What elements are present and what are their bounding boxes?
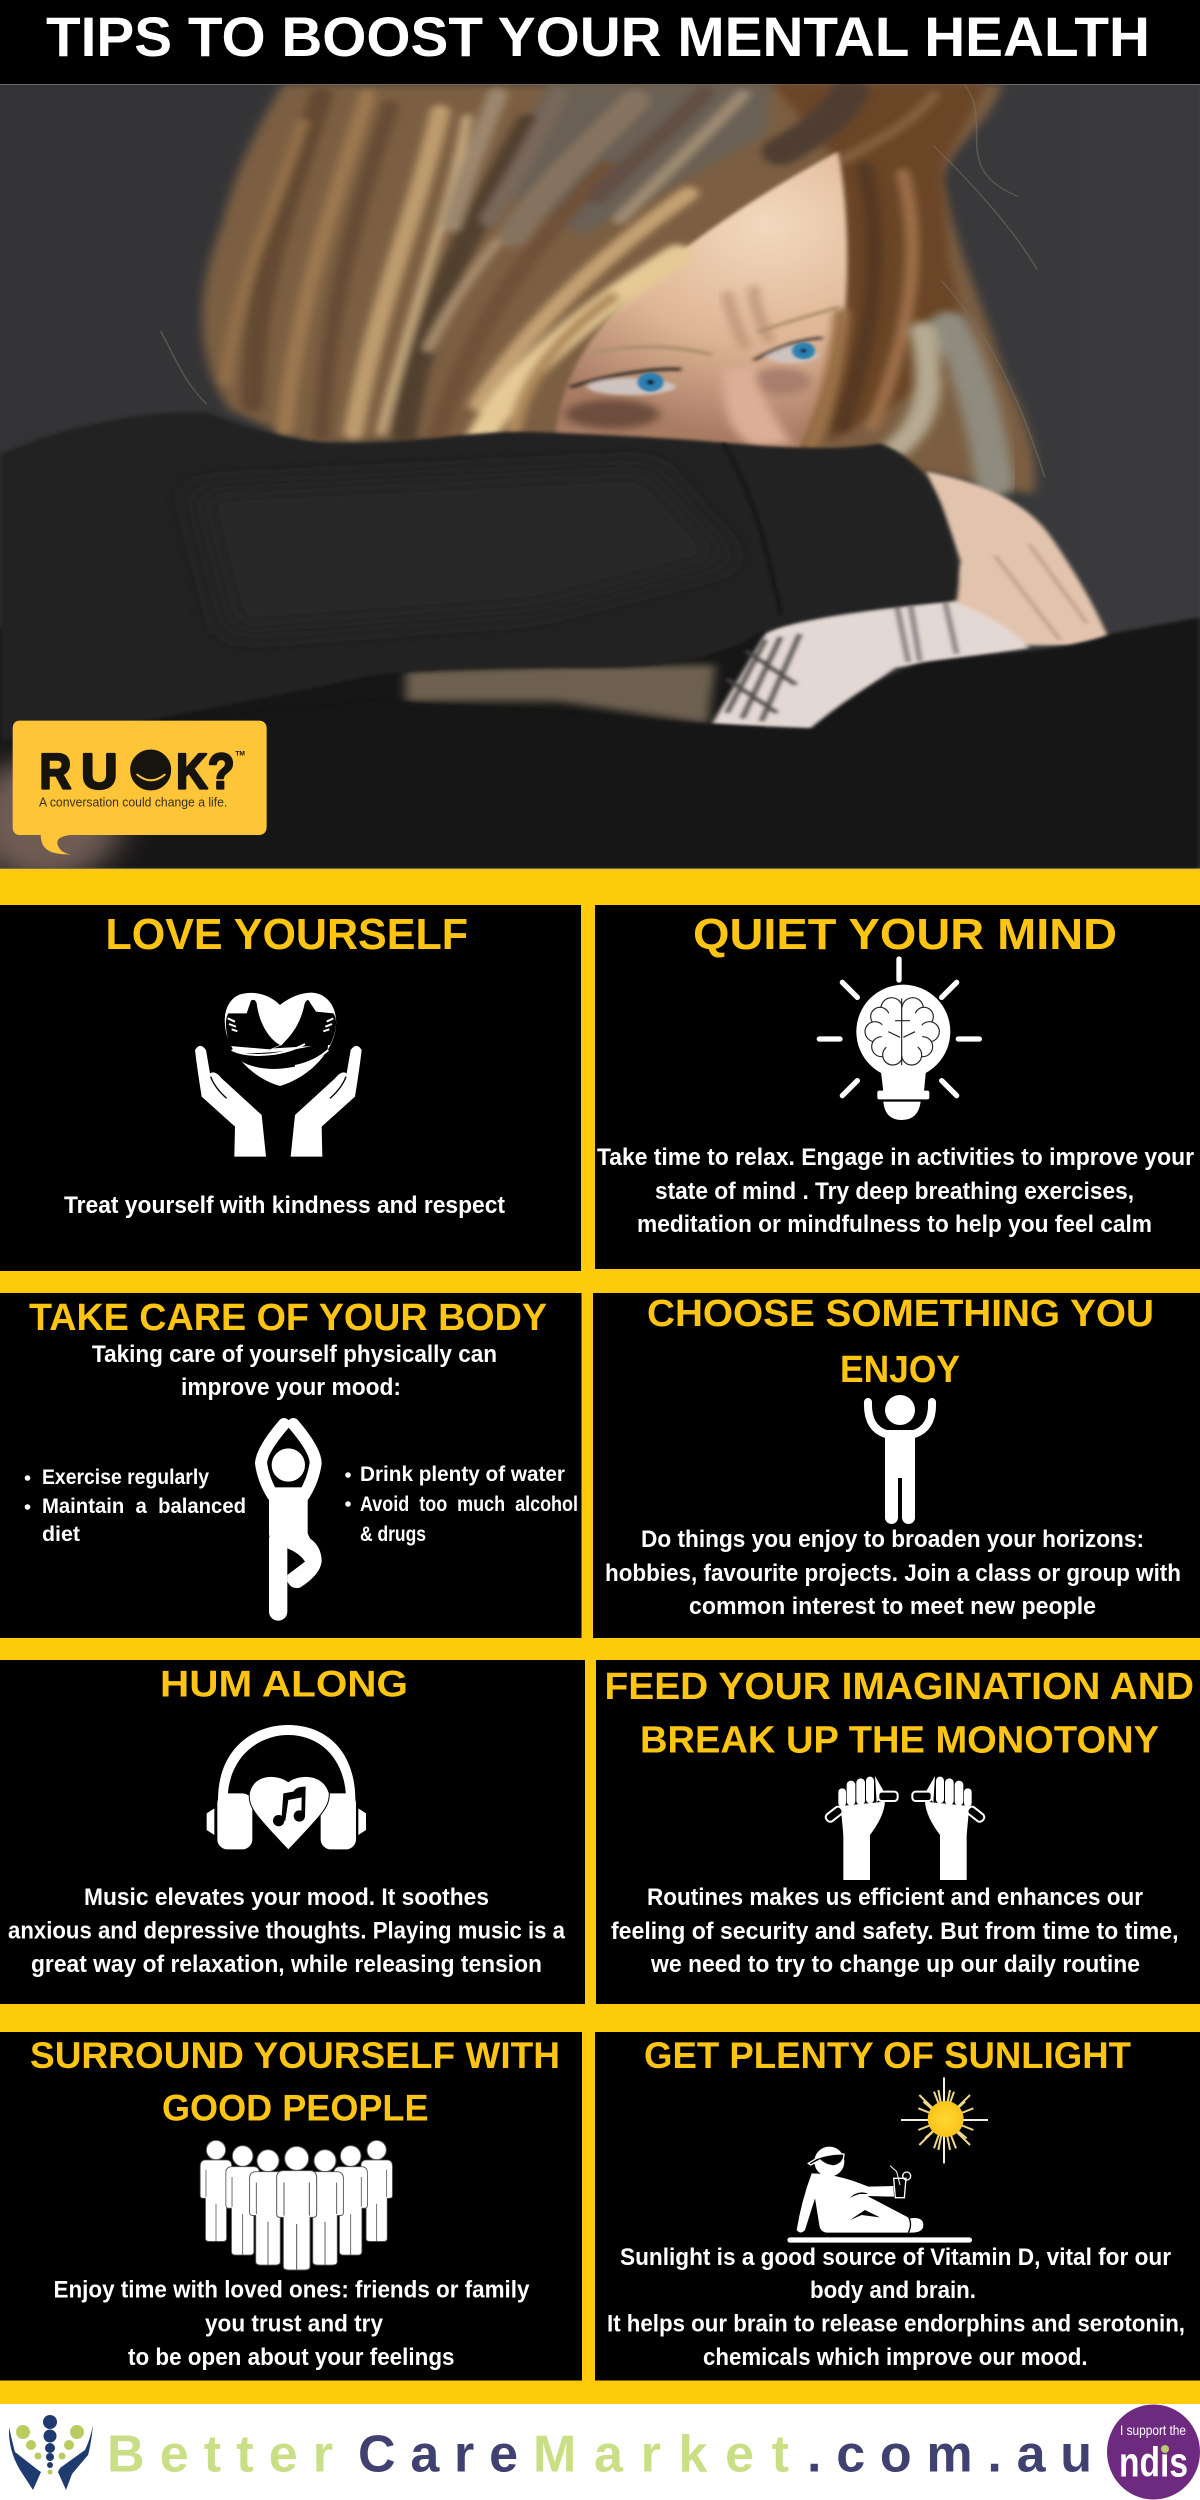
heading: LOVE YOURSELF [106, 910, 468, 959]
wordmark: Better [107, 2426, 333, 2484]
icon: hands with spine dots [9, 2415, 93, 2490]
icon: yoga tree pose [261, 1424, 322, 1621]
body text: meditation or mindfulness to help you feel calm [637, 1211, 1152, 1238]
wordmark: Care [358, 2426, 518, 2484]
intro text: Taking care of yourself physically can [92, 1341, 497, 1368]
icon: person with raised arms [868, 1395, 932, 1524]
icon: headphones with heart and music note [207, 1725, 366, 1850]
left bullet list [25, 1466, 246, 1546]
panel: surround yourself with good people [0, 2032, 582, 2380]
heading: GET PLENTY OF SUNLIGHT [644, 2035, 1131, 2076]
sun [901, 2077, 988, 2163]
left bullet list: Maintain a balanced [42, 1495, 246, 1518]
body text: you trust and try [205, 2310, 384, 2338]
body text: body and brain. [810, 2277, 976, 2304]
sunbather [797, 2147, 923, 2233]
NDIS badge [1107, 2404, 1200, 2500]
heading [30, 2035, 560, 2128]
body text: Music elevates your mood. It soothes [84, 1884, 489, 1911]
NDIS badge: I support the [1120, 2422, 1186, 2438]
logo letters: U [81, 744, 118, 800]
heading: TAKE CARE OF YOUR BODY [29, 1297, 547, 1339]
wordmark: Market [533, 2426, 789, 2484]
body text [607, 2244, 1185, 2371]
heading: CHOOSE SOMETHING YOU [647, 1293, 1154, 1335]
footer logo: Better Care Market [9, 2415, 1092, 2490]
heading: HUM ALONG [160, 1664, 408, 1704]
body text: Routines makes us efficient and enhances our [647, 1884, 1143, 1911]
heading: GOOD PEOPLE [162, 2088, 428, 2128]
right bullet list: Avoid too much alcohol [360, 1493, 578, 1516]
panel: feed your imagination [596, 1660, 1200, 2004]
wordmark: .com.au [807, 2426, 1092, 2484]
title bar [0, 0, 1200, 84]
body text: Do things you enjoy to broaden your horizons: [641, 1526, 1144, 1553]
heading [647, 1293, 1154, 1391]
body text: to be open about your feelings [128, 2344, 454, 2371]
icon: group of people [200, 2140, 392, 2270]
heading: SURROUND YOURSELF WITH [30, 2035, 560, 2076]
intro text [92, 1341, 497, 1401]
right bullet list: Drink plenty of water [360, 1463, 565, 1486]
panel: choose something you enjoy [593, 1293, 1200, 1638]
logo tagline: A conversation could change a life. [39, 795, 227, 810]
right bullet list [345, 1463, 578, 1546]
body text: Treat yourself with kindness and respect [64, 1192, 505, 1219]
logo letters: K? [176, 744, 235, 800]
body text [54, 2276, 530, 2371]
body text: common interest to meet new people [689, 1593, 1096, 1620]
R U OK? logo speech bubble [13, 721, 267, 854]
body text: great way of relaxation, while releasing tension [31, 1951, 542, 1978]
heading: BREAK UP THE MONOTONY [640, 1720, 1159, 1762]
right fist [912, 1776, 986, 1880]
body text [605, 1526, 1181, 1620]
logo letters [39, 744, 245, 800]
intro text: improve your mood: [181, 1374, 401, 1401]
beach mat [790, 2232, 969, 2248]
dark backdrop under the arm [0, 628, 766, 768]
body text [8, 1884, 566, 1978]
left fist [824, 1776, 898, 1880]
yellow background band [0, 869, 1200, 2404]
body text: feeling of security and safety. But from time to time, [611, 1918, 1178, 1945]
heading: ENJOY [840, 1349, 960, 1391]
logo letters: R [39, 744, 71, 800]
body text: state of mind . Try deep breathing exercises, [655, 1178, 1134, 1205]
right bullet list: & drugs [360, 1523, 426, 1546]
panel: hum along [0, 1660, 585, 2004]
hero photo: distressed woman hiding behind her arm [0, 84, 1200, 881]
body text: we need to try to change up our daily routine [650, 1951, 1140, 1978]
body text: Sunlight is a good source of Vitamin D, vital for our [620, 2244, 1171, 2271]
body text [611, 1884, 1178, 1978]
panel: quiet your mind [595, 905, 1200, 1269]
heading: QUIET YOUR MIND [693, 910, 1117, 959]
panel: get plenty of sunlight [595, 2032, 1200, 2380]
panel: love yourself [0, 905, 581, 1271]
icon: light bulb with brain [819, 959, 979, 1120]
title: TIPS TO BOOST YOUR MENTAL HEALTH [46, 5, 1150, 68]
panel: take care of your body [0, 1293, 582, 1638]
left bullet list: Exercise regularly [42, 1466, 209, 1489]
icon: raised fists breaking a chain [824, 1776, 986, 1880]
body text: Enjoy time with loved ones: friends or family [54, 2276, 530, 2304]
logo letters: TM [235, 750, 245, 757]
body text [597, 1144, 1194, 1238]
icon: hands holding hugging heart [195, 993, 362, 1157]
body text: anxious and depressive thoughts. Playing music is a [8, 1918, 566, 1944]
left bullet list: diet [42, 1523, 80, 1546]
heading: FEED YOUR IMAGINATION AND [604, 1666, 1194, 1708]
body text: chemicals which improve our mood. [703, 2344, 1088, 2371]
heading [604, 1666, 1194, 1762]
icon: person sunbathing under the sun [790, 2077, 988, 2240]
